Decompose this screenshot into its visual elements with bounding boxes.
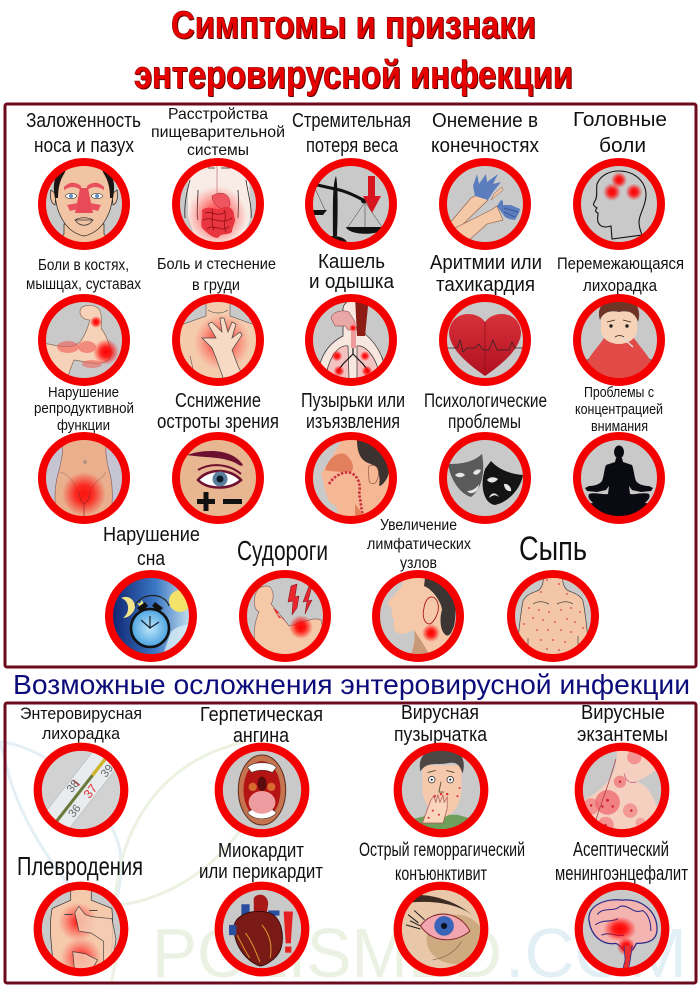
symptom: psychological problems: Психологические — [424, 391, 547, 412]
complication: viral pemphigus: Вирусная — [401, 702, 479, 724]
symptom: rash: Сыпь — [519, 530, 587, 568]
symptom: reproductive dysfunction: репродуктивной — [34, 401, 134, 417]
symptom: sleep disorder: сна — [137, 548, 166, 570]
symptom: rapid weight loss: Стремительная — [292, 110, 411, 132]
symptom: cough and dyspnea: и одышка — [309, 271, 395, 293]
symptom: seizures — [237, 535, 328, 662]
symptom: sleep disorder: Нарушение — [103, 524, 200, 546]
symptom: blisters or ulcers: изъязвления — [306, 411, 400, 433]
symptom: intermittent fever — [557, 254, 684, 386]
symptom: psychological problems — [424, 391, 547, 520]
symptom: nasal congestion — [26, 110, 141, 250]
symptom: arrhythmia — [430, 252, 542, 382]
symptom: chest pain — [157, 256, 276, 386]
symptom: bone and muscle pain: Боли в костях, — [38, 257, 129, 274]
symptom: concentration problems — [575, 385, 663, 524]
complication: myocarditis: или перикардит — [199, 861, 323, 883]
symptom: headaches — [573, 109, 667, 246]
symptom: cough and dyspnea — [309, 251, 395, 386]
symptom: reproductive dysfunction: функции — [57, 418, 110, 434]
symptom: headaches: боли — [599, 135, 646, 157]
symptom: cough and dyspnea: Кашель — [318, 251, 385, 273]
symptom: headaches: Головные — [573, 109, 667, 131]
complication: enteroviral fever: Энтеровирусная — [20, 704, 142, 723]
symptom: psychological problems: проблемы — [448, 412, 521, 433]
symptom: sleep disorder — [103, 524, 200, 660]
symptom: rash — [511, 530, 595, 662]
complication: pleurodynia: Плевродения — [17, 851, 143, 881]
symptom: nasal congestion: Заложенность — [26, 110, 141, 132]
symptom: concentration problems: концентрацией — [575, 402, 663, 418]
title: Симптомы и признаки — [171, 4, 536, 47]
symptom: intermittent fever: Перемежающаяся — [557, 254, 684, 273]
symptom: seizures: Судороги — [237, 535, 328, 566]
complication: herpangina: Герпетическая — [200, 704, 323, 726]
symptom: reduced visual acuity: Сснижение — [175, 390, 261, 412]
panel: symptoms — [5, 104, 696, 667]
panel: complications — [5, 703, 696, 983]
symptom: rapid weight loss: потеря веса — [306, 135, 399, 157]
title: энтеровирусной инфекции — [134, 54, 573, 97]
complication: enteroviral fever: 38 — [65, 778, 82, 795]
symptom: blisters or ulcers: Пузырьки или — [301, 390, 405, 412]
complication: viral exanthems — [577, 702, 668, 837]
complication: viral pemphigus: пузырчатка — [394, 724, 488, 746]
symptom: limb numbness: конечностях — [431, 135, 539, 157]
symptom: digestive disorders — [151, 106, 285, 248]
symptom: digestive disorders: пищеварительной — [151, 124, 285, 141]
symptom: chest pain: Боль и стеснение — [157, 256, 276, 273]
complication: viral exanthems: Вирусные — [581, 702, 665, 724]
symptom: reduced visual acuity — [157, 390, 279, 520]
symptom: concentration problems: Проблемы с — [584, 385, 654, 401]
complication: hemorrhagic conjunctivitis: Острый геморрагический — [359, 840, 525, 861]
complication: pleurodynia — [17, 851, 143, 978]
symptom: nasal congestion: носа и пазух — [34, 135, 134, 157]
heading: complications: Возможные осложнения энтеровирусной инфекции — [13, 669, 690, 700]
complication: hemorrhagic conjunctivitis — [359, 840, 525, 972]
symptom: enlarged lymph nodes: узлов — [400, 555, 437, 572]
complication: herpangina — [200, 704, 323, 833]
watermark: POLISMED.COM logo: POLISMED — [152, 914, 502, 990]
complication: enteroviral fever: 39 — [99, 763, 116, 780]
title: энтеровирусной инфекции — [135, 55, 574, 98]
title: Симптомы и признаки — [172, 5, 537, 48]
complication: enteroviral fever: лихорадка — [42, 724, 121, 743]
complication: enteroviral fever: 37 — [81, 782, 100, 801]
symptom: rapid weight loss — [292, 110, 411, 246]
symptom: limb numbness — [431, 110, 539, 246]
complication: aseptic meningoencephalitis: Асептический — [573, 839, 669, 861]
symptom: reproductive dysfunction — [34, 385, 134, 524]
complication: myocarditis — [199, 840, 323, 972]
symptom: chest pain: в груди — [192, 277, 240, 294]
symptom: reduced visual acuity: остроты зрения — [157, 411, 279, 433]
complication: hemorrhagic conjunctivitis: конъюнктивит — [395, 864, 487, 885]
complication: viral pemphigus — [394, 702, 488, 837]
symptom: bone and muscle pain: мышцах, суставах — [26, 276, 141, 293]
symptom: enlarged lymph nodes: Увеличение — [380, 517, 457, 534]
symptom: reproductive dysfunction: Нарушение — [48, 385, 119, 401]
symptom: enlarged lymph nodes — [367, 517, 471, 662]
watermark: POLISMED.COM logo: .COM — [505, 914, 687, 990]
watermark: POLISMED.COM logo — [0, 742, 687, 990]
symptom: arrhythmia: тахикардия — [436, 274, 535, 296]
symptom: digestive disorders: Расстройства — [168, 106, 268, 123]
symptom: digestive disorders: системы — [187, 142, 249, 159]
symptom: concentration problems: внимания — [591, 419, 648, 435]
symptom: bone and muscle pain — [26, 257, 141, 386]
complication: enteroviral fever — [20, 708, 141, 838]
complication: enteroviral fever: 36 — [66, 803, 84, 820]
complication: myocarditis: Миокардит — [218, 840, 304, 862]
symptom: limb numbness: Онемение в — [432, 110, 538, 132]
complication: viral exanthems: экзантемы — [577, 724, 668, 746]
symptom: blisters or ulcers — [301, 390, 405, 524]
complication: aseptic meningoencephalitis — [555, 839, 688, 972]
symptom: arrhythmia: Аритмии или — [430, 252, 542, 274]
symptom: intermittent fever: лихорадка — [583, 276, 657, 295]
title — [134, 4, 574, 98]
symptom: enlarged lymph nodes: лимфатических — [367, 536, 471, 553]
complication: herpangina: ангина — [233, 725, 290, 747]
